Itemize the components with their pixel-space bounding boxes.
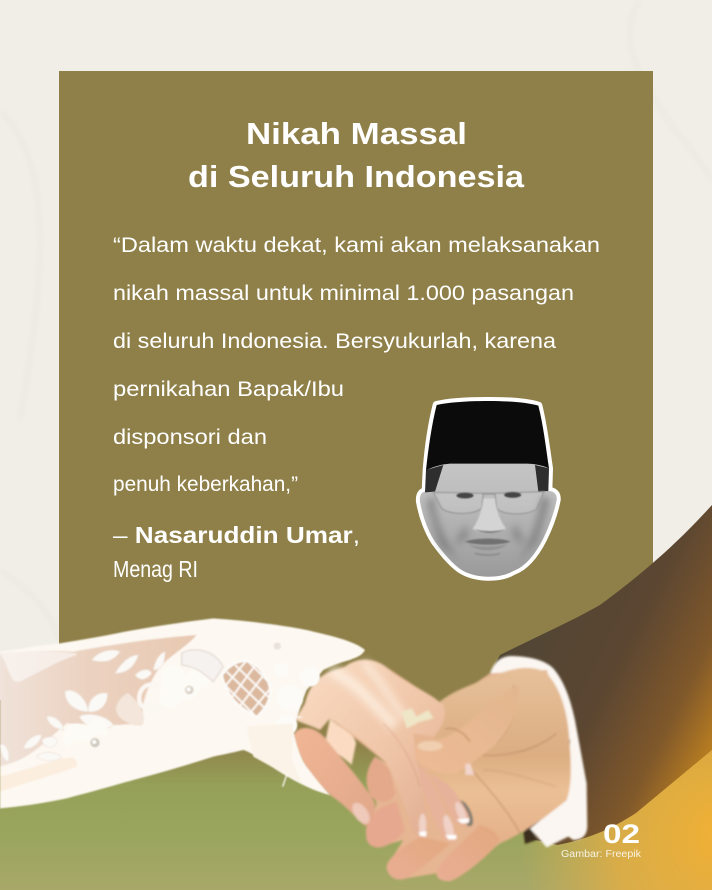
quote text: di seluruh Indonesia. Bersyukurlah, karena: [113, 329, 556, 353]
quote text: disponsori dan: [113, 425, 267, 449]
bride nail behind thumb: [465, 763, 474, 775]
lace leaves: [0, 650, 165, 762]
lace seen through the bride's hand: [325, 718, 356, 765]
sheer tulle: [0, 635, 197, 767]
groom palm: [430, 668, 571, 843]
lace lattice: [222, 658, 275, 717]
lace flower top: [159, 666, 220, 717]
title: [188, 116, 525, 194]
portrait: Nasaruddin Umar: [420, 401, 557, 577]
quote attribution: [113, 522, 360, 582]
blurred garden ground: [0, 690, 712, 890]
page number: 02: [603, 819, 640, 849]
peach lining: [0, 757, 77, 792]
lace curl: [139, 684, 160, 710]
groom palm creases: [473, 685, 557, 833]
quote attribution: Menag RI: [113, 556, 198, 582]
bride lace sleeve: [0, 618, 365, 808]
loose threads: [283, 717, 302, 787]
panel: quote background: [59, 71, 653, 711]
quote text: penuh keberkahan,”: [113, 472, 298, 496]
jacket cuff shadow: [523, 828, 537, 844]
jacket: [489, 505, 712, 845]
groom thumb: [415, 685, 519, 774]
bride hand and fingers: [430, 773, 470, 825]
lace flower bottom: [63, 719, 113, 761]
bride lower finger: [293, 728, 375, 826]
quote text: [113, 233, 600, 496]
wedding ring: [402, 708, 433, 728]
lace cuff trim: [247, 663, 320, 783]
image credit: Gambar: Freepik: [561, 849, 642, 860]
quote attribution: – Nasaruddin Umar ,: [113, 522, 360, 548]
title: di Seluruh Indonesia: [188, 159, 525, 194]
quote text: nikah massal untuk minimal 1.000 pasangan: [113, 281, 574, 305]
quote text: “Dalam waktu dekat, kami akan melaksanakan: [113, 233, 600, 257]
groom fingers: [436, 825, 499, 881]
hands and shirt cuff: [293, 656, 587, 882]
lace sprig: [182, 650, 223, 682]
quote text: pernikahan Bapak/Ibu: [113, 377, 344, 401]
hands base silhouette: [305, 663, 569, 882]
shirt cuff: [490, 656, 587, 847]
title: Nikah Massal: [246, 116, 467, 151]
groom ring: [454, 798, 476, 829]
